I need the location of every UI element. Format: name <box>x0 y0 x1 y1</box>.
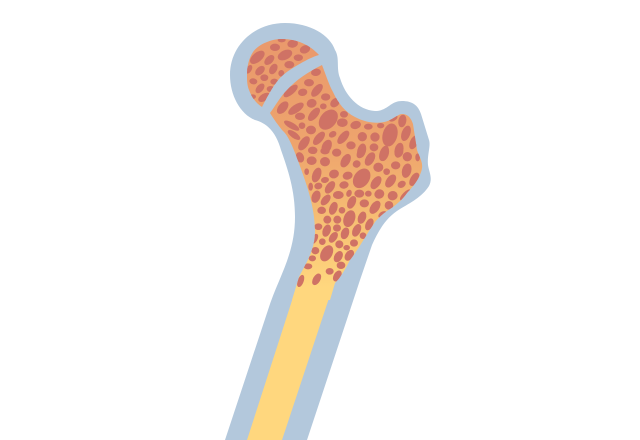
outer cortical bone <box>225 23 431 440</box>
trabecular pores lower <box>295 146 421 287</box>
illustration: proximal femur cross-section <box>225 23 431 440</box>
spongy bone fill <box>247 39 422 300</box>
spongy bone <box>247 39 422 300</box>
marrow canal <box>247 280 335 440</box>
trabecular pores upper <box>245 38 420 161</box>
